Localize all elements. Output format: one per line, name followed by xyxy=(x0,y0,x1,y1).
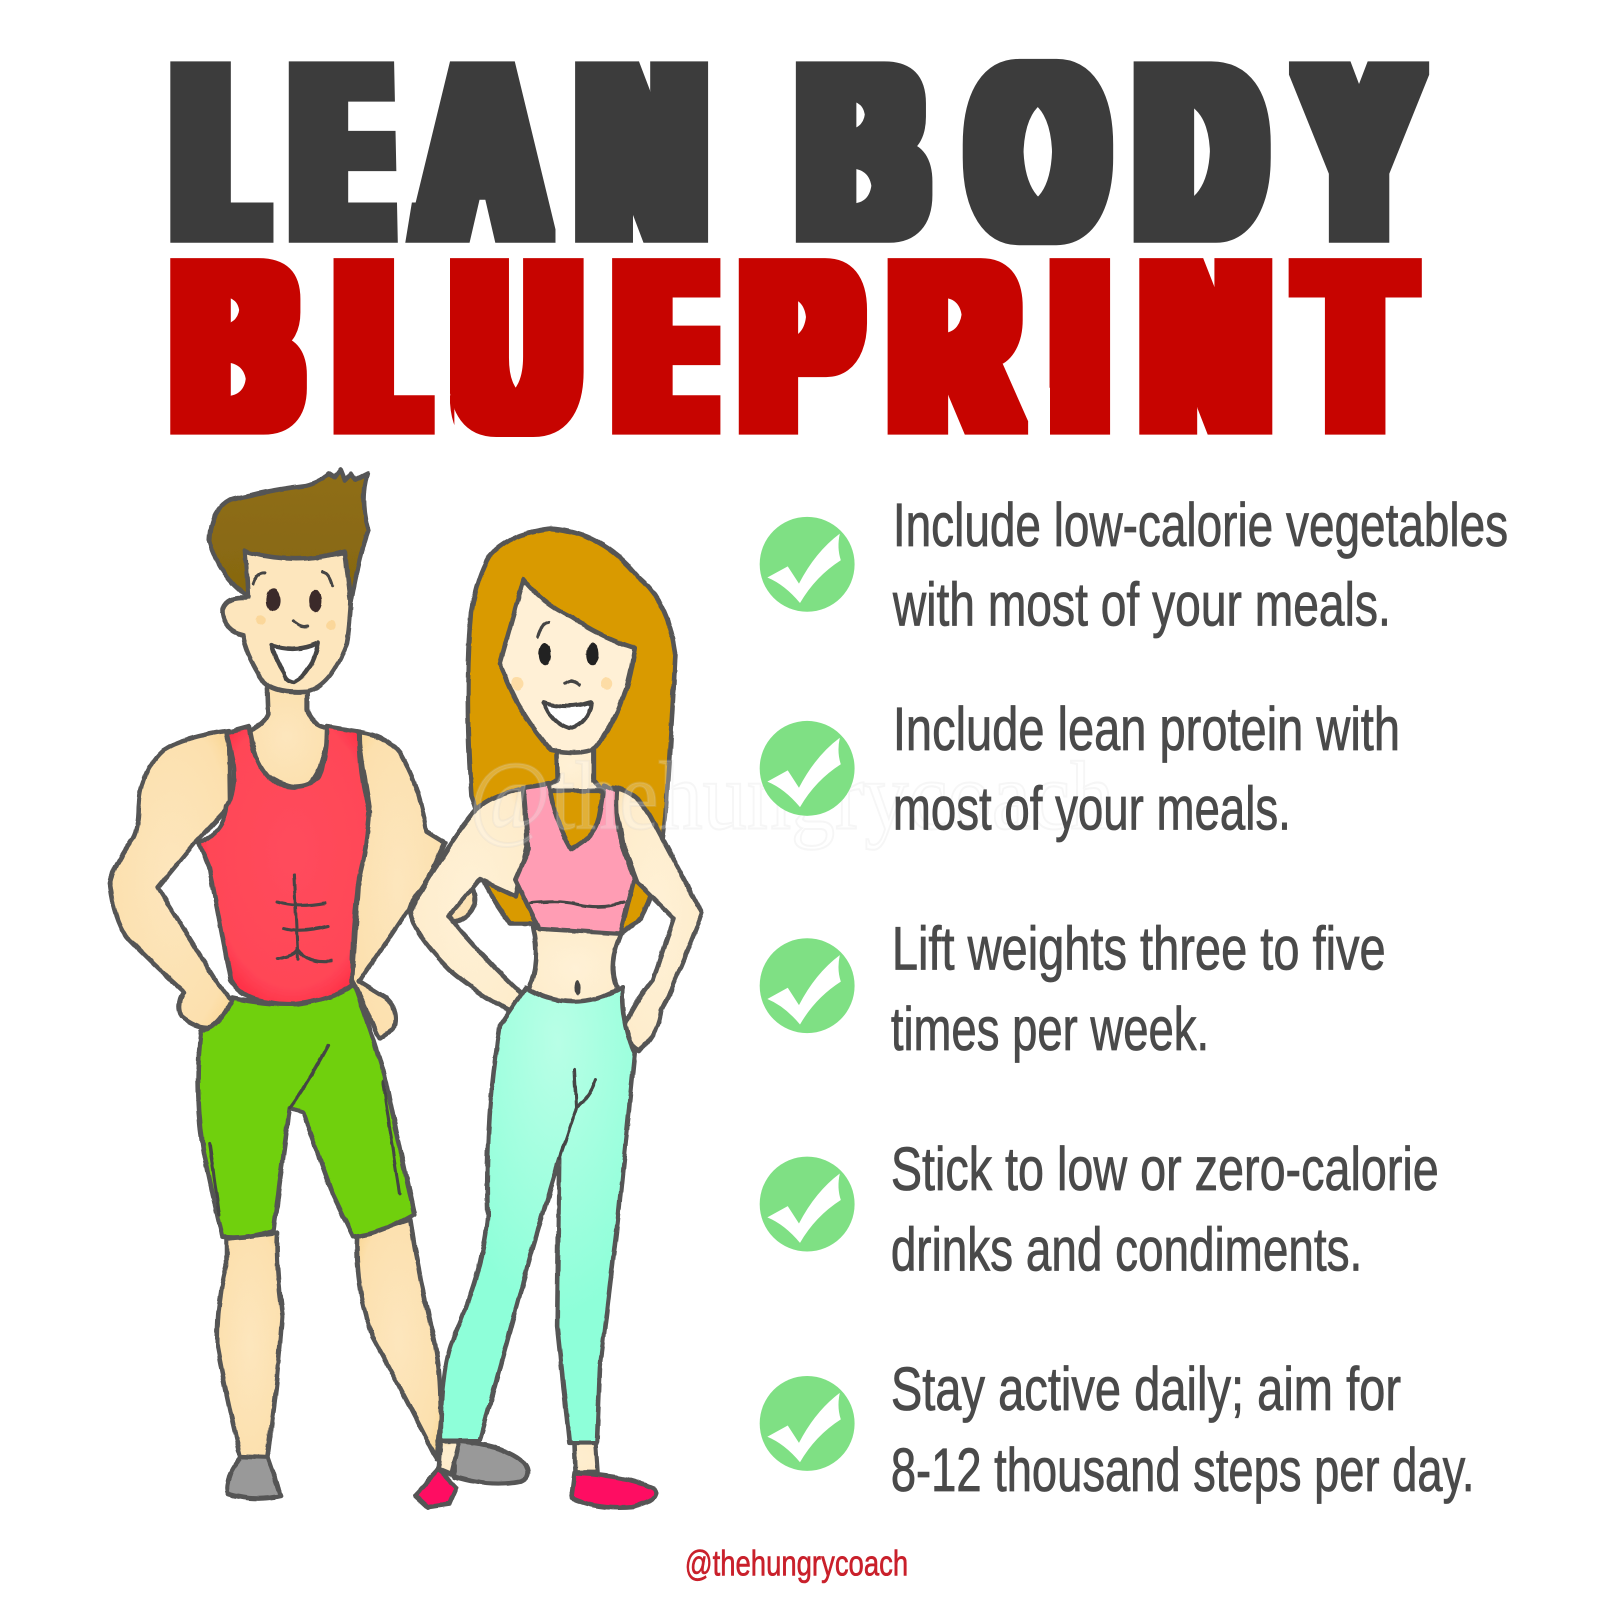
tip 3 text: times per week. xyxy=(891,995,1209,1063)
tip 3 text: Lift weights three to five xyxy=(892,914,1386,982)
tip 2 xyxy=(760,695,1400,843)
woman: leggings xyxy=(441,988,635,1443)
tip 1 text: with most of your meals. xyxy=(892,571,1391,639)
watermark: @thehungrycoach xyxy=(469,743,1114,851)
tip 2 text xyxy=(893,695,1400,843)
title: BLUEPRINT: BLUEPRINT xyxy=(178,214,1405,479)
tip 3 text xyxy=(891,914,1386,1063)
tip 2 text: most of your meals. xyxy=(893,775,1291,843)
woman: back shoe xyxy=(454,1441,528,1484)
woman: smile xyxy=(544,702,592,729)
man: abs lines xyxy=(278,874,332,962)
tip 3 xyxy=(760,914,1386,1063)
tip 2 text: Include lean protein with xyxy=(893,695,1400,763)
man: left shoe xyxy=(226,1456,281,1499)
title: LEAN BODY: LEAN BODY xyxy=(178,16,1413,289)
icon: green check xyxy=(760,938,855,1033)
woman: front shoe xyxy=(415,1469,456,1507)
tip 1 text xyxy=(892,491,1508,639)
man: smile xyxy=(271,643,318,683)
man: eyes, nose and brows xyxy=(253,572,336,630)
woman: neck and chest xyxy=(539,740,602,791)
icon: green check xyxy=(760,517,855,612)
tip 5 xyxy=(760,1355,1474,1504)
woman: face xyxy=(500,580,635,753)
woman: eyes, nose and brows xyxy=(511,622,612,690)
icon: green check xyxy=(760,721,855,816)
woman: left arm xyxy=(410,788,531,1026)
footer handle: @thehungrycoach xyxy=(685,1544,908,1584)
tip 4 text xyxy=(891,1135,1439,1283)
tip 5 text xyxy=(891,1355,1474,1504)
man: hand behind woman xyxy=(429,884,475,922)
illustration: man xyxy=(110,469,475,1499)
man: right leg xyxy=(357,1219,441,1459)
woman: midriff xyxy=(529,927,622,1010)
tip 5 text: Stay active daily; aim for xyxy=(891,1355,1401,1423)
man: shorts xyxy=(198,984,414,1238)
tip 4 xyxy=(760,1135,1439,1283)
tip 1 xyxy=(760,491,1508,639)
tip 4 text: drinks and condiments. xyxy=(891,1215,1362,1283)
woman: hair xyxy=(468,529,676,935)
man: neck xyxy=(245,686,329,788)
woman: crop top xyxy=(515,784,635,934)
man: hair xyxy=(209,469,368,602)
icon: green check xyxy=(760,1376,855,1471)
tip 4 text: Stick to low or zero-calorie xyxy=(891,1135,1439,1203)
man: left arm xyxy=(110,731,235,1027)
woman: right arm xyxy=(612,788,702,1051)
woman: right shoe xyxy=(571,1473,656,1508)
panel: checklist tips xyxy=(760,491,1508,1504)
woman: ankles xyxy=(439,1441,598,1474)
man: tank top xyxy=(199,727,369,1005)
man: left leg xyxy=(217,1233,283,1457)
man: right arm xyxy=(352,732,445,1039)
icon: green check xyxy=(760,1157,855,1252)
illustration: woman xyxy=(410,529,702,1508)
man: face xyxy=(222,551,352,692)
